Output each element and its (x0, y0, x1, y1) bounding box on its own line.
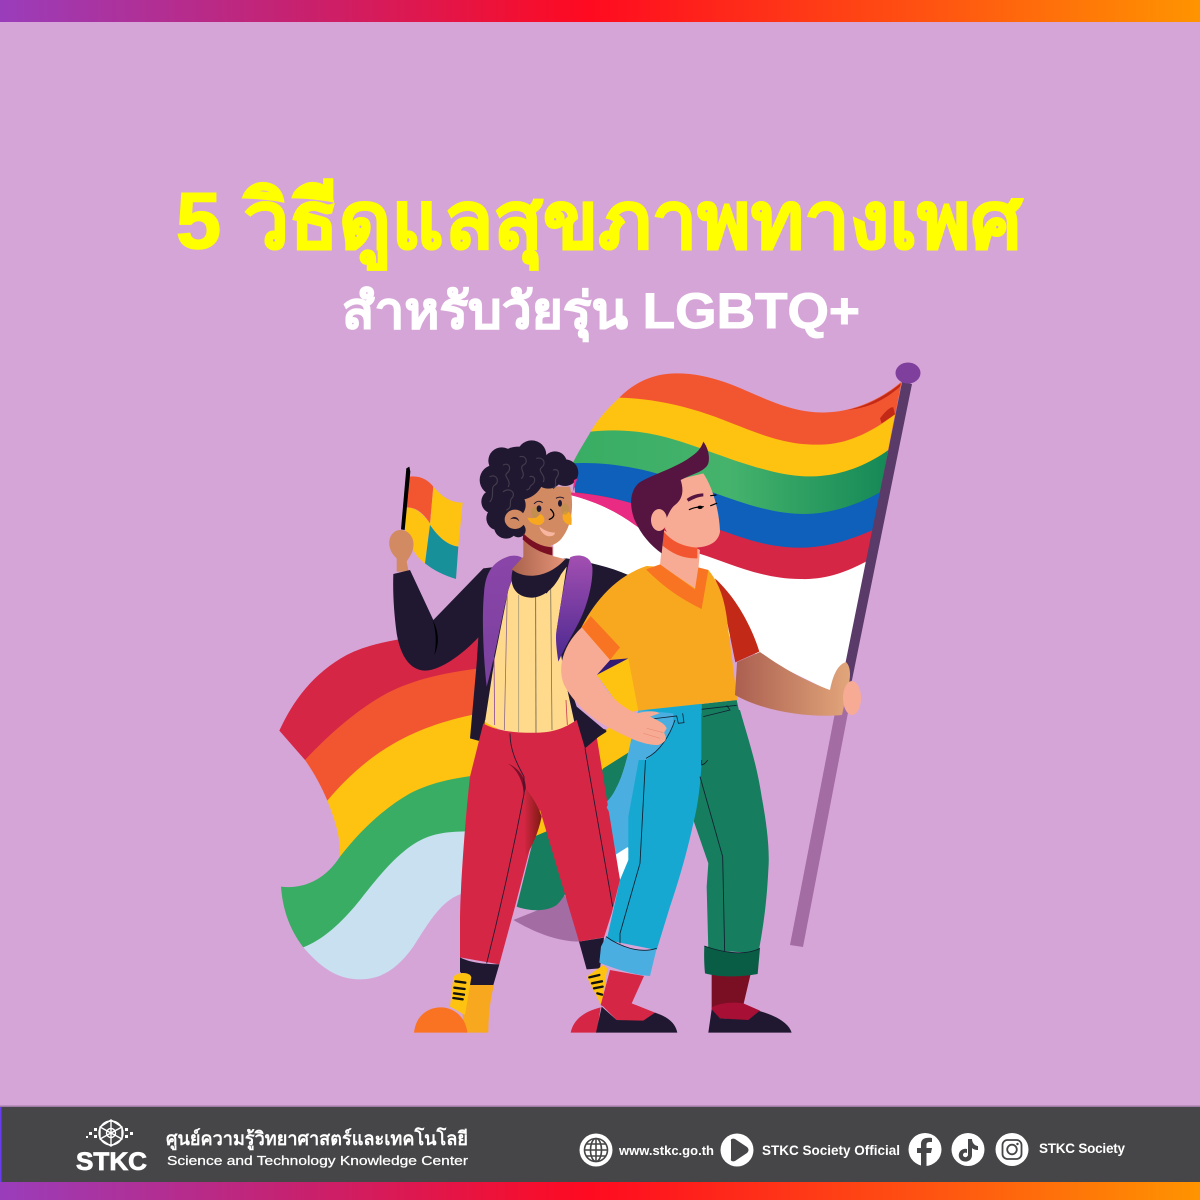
green cuff (704, 946, 760, 976)
blue leg (607, 710, 702, 950)
shirt (578, 566, 737, 711)
back boot laces (587, 965, 607, 1006)
cape shadow (513, 893, 587, 942)
choker (523, 533, 552, 555)
flagpole (790, 362, 920, 947)
centre name (166, 1127, 469, 1168)
front hand on pole (843, 681, 861, 715)
jacket hem (577, 720, 607, 748)
hair (631, 442, 709, 553)
youtube text: STKC Society Official (762, 1143, 900, 1158)
shirt and arm (561, 530, 759, 760)
head (631, 442, 720, 558)
small flag (401, 467, 463, 579)
cape light-blue fold (605, 740, 640, 863)
cape yellow fold (523, 710, 633, 837)
face details (527, 514, 544, 525)
rainbow cape behind figures (279, 627, 640, 979)
centre name: Science and Technology Knowledge Center (167, 1153, 469, 1168)
sleeve band (582, 616, 620, 660)
main rainbow flag (553, 373, 902, 691)
STKC logo: STKC (76, 1148, 147, 1176)
bottom gradient bar (0, 1182, 1200, 1200)
eyebrow and eye (687, 493, 703, 502)
icon: website globe (580, 1134, 612, 1166)
illustration: two teens with rainbow flags (279, 362, 920, 1033)
back sock (579, 938, 604, 969)
neck (512, 533, 566, 579)
raised hand (389, 530, 414, 572)
head (480, 440, 578, 546)
website text: www.stkc.go.th (618, 1143, 714, 1158)
blue cuff (599, 937, 657, 976)
left teen trousers and boots (414, 720, 620, 1033)
curly hair (480, 440, 578, 539)
green leg (693, 710, 769, 953)
footer band (0, 1106, 1200, 1182)
waistband (638, 703, 702, 760)
left boot (414, 973, 494, 1033)
back foot (708, 974, 792, 1033)
light-blue jean shade (607, 710, 660, 848)
front trouser cuff (460, 957, 499, 985)
front foot (571, 970, 677, 1033)
hidden yellow and dark purple (597, 657, 638, 713)
backpack straps (483, 556, 523, 687)
icon: tiktok (952, 1133, 984, 1166)
instagram text: STKC Society (1039, 1141, 1125, 1156)
title: 5 วิธีดูแลสุขภาพทางเพศ (176, 176, 1023, 271)
striped top (485, 567, 575, 734)
jeans and feet (571, 710, 792, 1033)
subtitle: สำหรับวัยรุ่น LGBTQ+ (342, 283, 860, 342)
icon: facebook (908, 1133, 942, 1166)
icon: instagram (996, 1133, 1028, 1166)
neck collar (512, 558, 566, 598)
red sleeve (715, 578, 759, 662)
cape dark green fold (517, 753, 628, 910)
cape white patch (615, 847, 632, 887)
figure: right teen (561, 442, 861, 1033)
arm and hand (561, 627, 667, 745)
neck shadow band (663, 531, 697, 558)
jacket (393, 558, 628, 747)
STKC logo (76, 1120, 147, 1176)
ear (651, 509, 667, 531)
figure: left teen (389, 440, 628, 747)
flagpole finial (896, 362, 920, 384)
trousers (460, 720, 620, 964)
top gradient bar (0, 0, 1200, 22)
collar and neck (660, 530, 700, 589)
icon: youtube play (720, 1134, 754, 1166)
right arm holding flag (735, 652, 850, 716)
centre name: ศูนย์ความรู้วิทยาศาสตร์และเทคโนโลยี (166, 1127, 468, 1151)
